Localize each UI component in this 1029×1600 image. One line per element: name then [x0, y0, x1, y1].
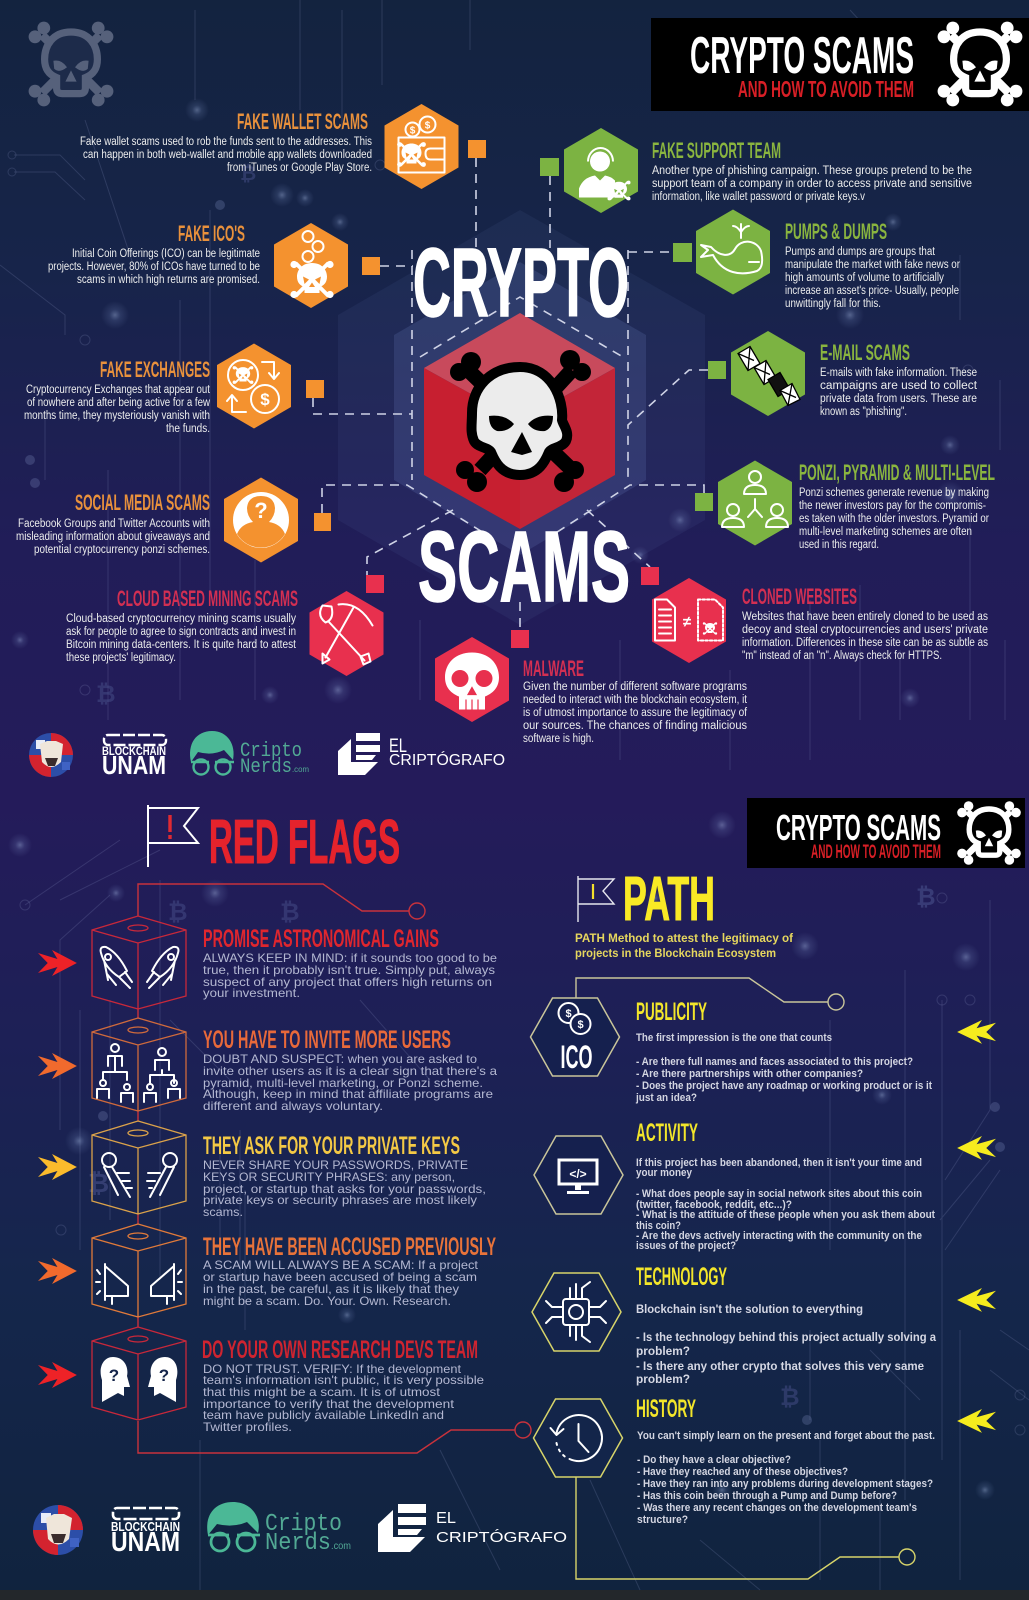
icon: code monitor hexagon: </>: [569, 1167, 587, 1181]
panel: fake exchanges: the funds.: [166, 423, 210, 435]
panel: cloned websites: decoy and steal cryptocurrencies and users' private: [742, 624, 988, 636]
path intro text: [575, 933, 793, 960]
panel: promise astronomical gains: ALWAYS KEEP IN MIND: if it sounds too good to be: [203, 951, 497, 965]
icon: coins and skull hexagon: [274, 223, 348, 308]
icon: exchange hexagon: $: [260, 390, 270, 409]
logo strip: partners bottom: [33, 1502, 567, 1557]
cube with head question icons: ?: [159, 1366, 169, 1385]
panel: do your own research devs team: team have publicly available LinkedIn and: [203, 1408, 444, 1422]
panel: fake ico's: projects. However, 80% of ICOs have turned to be: [48, 261, 260, 273]
panel: you have to invite more users: DOUBT AND SUSPECT: when you are asked to: [203, 1052, 477, 1066]
panel: social media scams: potential cryptocurrency ponzi schemes.: [34, 544, 210, 556]
panel: fake ico's: FAKE ICO'S: [178, 221, 245, 246]
panel: malware: [435, 630, 748, 745]
connector square: [673, 243, 692, 262]
panel: activity: ACTIVITY: [636, 1119, 698, 1147]
arrow: [38, 1258, 77, 1284]
panel: cloud based mining scams: CLOUD BASED MINING SCAMS: [117, 586, 298, 611]
panel: cloned websites: information. Differences in these site can be as subtle as: [742, 637, 988, 649]
logo: el criptografo: EL: [436, 1510, 456, 1527]
arrow: [957, 1409, 996, 1433]
cube with rocket icons: [92, 916, 186, 1009]
icon: red flag: [148, 805, 198, 867]
arrow: [38, 1362, 77, 1388]
panel: malware: MALWARE: [523, 656, 584, 681]
logo: cripto nerds: [207, 1502, 351, 1557]
panel: technology: - Is the technology behind this project actually solving a: [636, 1330, 936, 1344]
panel: they have been accused previously: or startup have been accused of being a scam: [203, 1270, 477, 1284]
panel: malware: software is high.: [523, 733, 594, 745]
cube with hierarchy icons: [92, 1018, 186, 1111]
panel: social media scams: [16, 478, 331, 562]
path connector wires: [576, 978, 915, 1579]
icon: clock history hexagon: [534, 1399, 622, 1477]
panel: social media scams: Facebook Groups and Twitter Accounts with: [18, 518, 210, 530]
connector square: [468, 140, 486, 158]
panel: publicity: - Are there partnerships with other companies?: [636, 1068, 863, 1080]
text: ₿: [168, 899, 188, 926]
panel: e-mail scams: campaigns are used to collect: [820, 380, 978, 392]
panel: you have to invite more users: Although, keep in mind that affiliate programs are: [203, 1087, 493, 1101]
icon: white skull hexagon: [435, 637, 509, 722]
panel: publicity: - Are there full names and faces associated to this project?: [636, 1056, 913, 1068]
panel: history: - Do they have a clear objective?: [637, 1454, 791, 1466]
panel: fake wallet scams: FAKE WALLET SCAMS: [237, 109, 368, 134]
title: crypto: CRYPTO: [413, 228, 629, 337]
panel: you have to invite more users: [38, 1018, 497, 1113]
panel: cloud based mining scams: Bitcoin mining data-centers. It is quite hard to attest: [66, 639, 297, 651]
panel: pumps and dumps: increase an asset's price- Usually, people: [785, 285, 959, 297]
panel: activity: issues of the project?: [636, 1240, 736, 1252]
connector square: [695, 493, 713, 511]
panel: they have been accused previously: A SCAM WILL ALWAYS BE A SCAM: If a project: [203, 1258, 479, 1272]
panel: publicity: The first impression is the one that counts: [636, 1032, 832, 1044]
panel: fake support team: information, like wallet password or private keys.v: [652, 191, 865, 203]
icon: path flag: [578, 876, 614, 922]
panel: do your own research devs team: importance to verify that the development: [203, 1397, 455, 1411]
central hexagon backdrop: [338, 210, 705, 625]
icon: code monitor hexagon: [534, 1136, 623, 1214]
icon: ai chip hexagon: [532, 1273, 621, 1351]
icon: ico coins hexagon: ICO: [560, 1039, 592, 1075]
connector square: [708, 361, 726, 379]
logo: cripto nerds: Nerds: [240, 756, 292, 779]
panel: malware: needed to interact with the blockchain ecosystem, it: [523, 694, 748, 706]
logo: cripto nerds: .com: [292, 765, 309, 774]
panel: cloned websites: "m" instead of an "n". Always check for HTTPS.: [742, 650, 942, 662]
logo: el criptografo: CRIPTÓGRAFO: [436, 1529, 567, 1546]
connector square: [540, 158, 559, 176]
icon: anonymous person hexagon: [224, 478, 298, 562]
panel: activity: (twitter, facebook, reddit, etc...)?: [636, 1199, 792, 1211]
panel: fake ico's: scams in which high returns are promised.: [77, 274, 260, 286]
panel: history: - Has this coin been through a Pump and Dump before?: [637, 1490, 897, 1502]
connector square: [306, 380, 324, 398]
panel: pumps and dumps: [673, 210, 960, 310]
panel: technology: problem?: [636, 1372, 690, 1386]
central red cube: [424, 313, 615, 529]
panel: activity: your money: [636, 1167, 693, 1179]
panel: activity: - Are the devs actively interacting with the community on the: [636, 1230, 922, 1242]
panel: do your own research devs team: team's information isn't public, it is very possible: [203, 1373, 484, 1387]
cube with key circuit icons: [92, 1121, 186, 1214]
panel: do your own research devs team: DO NOT TRUST. VERIFY: If the development: [203, 1362, 462, 1376]
panel: promise astronomical gains: your investment.: [203, 986, 300, 1000]
panel: history: [534, 1395, 996, 1526]
icon: wallet hexagon: [384, 104, 458, 189]
icon: ico coins hexagon: $: [565, 1008, 572, 1020]
panel: activity: this coin?: [636, 1220, 681, 1232]
panel: they ask for your private keys: NEVER SHARE YOUR PASSWORDS, PRIVATE: [203, 1158, 468, 1172]
panel: they have been accused previously: might be a scam. Do. Your. Own. Research.: [203, 1294, 451, 1308]
connector square: [366, 575, 384, 593]
panel: fake exchanges: months time, they mysteriously vanish with: [24, 410, 210, 422]
panel: do your own research devs team: DO YOUR OWN RESEARCH DEVS TEAM: [202, 1336, 478, 1364]
panel: they have been accused previously: in the past, be careful, as it is likely that they: [203, 1282, 459, 1296]
panel: cloned websites: Websites that have been entirely cloned to be used as: [742, 611, 988, 623]
panel: e-mail scams: known as "phishing".: [820, 406, 907, 418]
panel: history: structure?: [637, 1514, 688, 1526]
panel: history: You can't simply learn on the present and forget about the past.: [637, 1430, 935, 1442]
logo: bulldog crest: [29, 733, 73, 777]
panel: ponzi pyramid and multi-level: es taken with the older investors. Pyramid or: [799, 513, 989, 525]
arrow: [38, 1154, 77, 1180]
panel: publicity: just an idea?: [635, 1092, 697, 1104]
panel: promise astronomical gains: [38, 916, 497, 1009]
logo: cripto nerds: [190, 731, 309, 779]
panel: technology: Blockchain isn't the solution to everything: [636, 1302, 863, 1316]
red flags connector wire: [138, 884, 531, 1453]
text: ₿: [96, 681, 116, 708]
panel: cloud based mining scams: these projects' legitimacy.: [66, 652, 176, 664]
central skull icon: [450, 350, 591, 492]
panel: fake exchanges: [24, 344, 324, 435]
panel: technology: TECHNOLOGY: [636, 1263, 727, 1291]
panel: activity: If this project has been abandoned, then it isn't your time and: [636, 1157, 922, 1169]
icon: pick and shovel hexagon: [310, 591, 384, 676]
panel: malware: our sources. The chances of finding malicious: [523, 720, 747, 732]
panel: e-mail scams: E-MAIL SCAMS: [820, 340, 910, 365]
panel: technology: - Is there any other crypto that solves this very same: [636, 1359, 924, 1373]
panel: history: - Have they reached any of these objectives?: [637, 1466, 848, 1478]
banner subtitle: AND HOW TO AVOID THEM: [738, 76, 914, 102]
connector square: [511, 630, 529, 648]
icon: whale hexagon: [696, 210, 770, 294]
panel: you have to invite more users: pyramid, multi-level marketing, or Ponzi scheme.: [203, 1076, 483, 1090]
logo strip: partners top: [29, 731, 505, 780]
text: ₿: [88, 1168, 109, 1198]
icon: wallet hexagon: $: [425, 120, 431, 132]
panel: e-mail scams: E-mails with fake information. These: [820, 367, 977, 379]
panel: pumps and dumps: unwittingly fall for this.: [785, 298, 881, 310]
panel: fake wallet scams: Fake wallet scams used to rob the funds sent to the addresses. This: [80, 136, 372, 148]
panel: you have to invite more users: invite other users as it is a clear sign that there's a: [203, 1064, 497, 1078]
icon: anonymous person hexagon: ?: [254, 498, 268, 523]
text: ₿: [916, 884, 936, 911]
logo: blockchain unam: UNAM: [102, 750, 166, 780]
logo: blockchain unam: UNAM: [111, 1526, 180, 1557]
path intro text: PATH Method to attest the legitimacy of: [575, 933, 793, 945]
icon: three people hexagon: [718, 460, 792, 546]
panel: fake support team: Another type of phishing campaign. These groups pretend to be the: [652, 165, 972, 177]
connector square: [314, 513, 331, 531]
logo: cripto nerds: Cripto: [240, 740, 302, 763]
panel: fake exchanges: FAKE EXCHANGES: [100, 357, 210, 382]
logo: cripto nerds: Nerds: [265, 1530, 331, 1557]
panel: history: - Have they ran into any problems during development stages?: [637, 1478, 933, 1490]
panel: social media scams: SOCIAL MEDIA SCAMS: [75, 490, 210, 515]
ghost skull icon: [29, 22, 113, 106]
banner skull icon: [957, 801, 1021, 865]
panel: ponzi pyramid and multi-level: the newer investors pay for the compromis-: [799, 500, 986, 512]
icon: cloned documents hexagon: ≠: [683, 614, 692, 630]
panel: fake support team: support team of a company in order to access private and sensitive: [652, 178, 972, 190]
panel: pumps and dumps: manipulate the market with fake news or: [785, 259, 960, 271]
panel: promise astronomical gains: suspect of any project that offers high returns on: [203, 975, 492, 989]
panel: ponzi pyramid and multi-level: Ponzi schemes generate revenue by making: [799, 487, 989, 499]
icon: exchange hexagon: [217, 344, 291, 428]
logo: blockchain unam: BLOCKCHAIN: [111, 1519, 180, 1534]
text: ₿: [280, 899, 300, 926]
arrow: [38, 950, 77, 976]
panel: promise astronomical gains: PROMISE ASTRONOMICAL GAINS: [203, 925, 439, 953]
arrow: [957, 1288, 996, 1312]
cube with head question icons: ?: [109, 1366, 119, 1385]
panel: e-mail scams: [708, 331, 978, 418]
panel: fake ico's: [48, 221, 380, 308]
icon: wallet hexagon: $: [410, 126, 416, 136]
icon: headset agent hexagon: [564, 128, 638, 213]
logo: cripto nerds: Cripto: [265, 1511, 342, 1538]
dashed connectors: [313, 158, 708, 630]
banner skull icon: [938, 22, 1022, 106]
logo: blockchain unam: [111, 1508, 180, 1557]
text: ₿: [780, 1384, 800, 1411]
panel: you have to invite more users: different and always voluntary.: [203, 1099, 383, 1113]
panel: you have to invite more users: YOU HAVE TO INVITE MORE USERS: [203, 1026, 451, 1054]
panel: cloud based mining scams: Cloud-based cryptocurrency mining scams usually: [66, 613, 296, 625]
logo: el criptografo: CRIPTÓGRAFO: [389, 750, 505, 769]
panel: publicity: PUBLICITY: [636, 998, 707, 1026]
panel: publicity: [530, 998, 996, 1104]
connector square: [641, 567, 659, 585]
panel: e-mail scams: private data from users. These are: [820, 393, 977, 405]
panel: fake wallet scams: [80, 104, 486, 189]
panel: history: HISTORY: [636, 1395, 696, 1423]
logo: el criptografo: EL: [389, 736, 407, 757]
panel: cloud based mining scams: ask for people to agree to sign contracts and invest in: [66, 626, 296, 638]
panel: technology: problem?: [636, 1344, 690, 1358]
arrow: [38, 1053, 77, 1079]
path intro text: projects in the Blockchain Ecosystem: [575, 948, 776, 960]
panel: fake wallet scams: can happen in both web-wallet and mobile app wallets downloaded: [83, 149, 372, 161]
panel: they ask for your private keys: project, or startup that asks for your passwords,: [203, 1182, 486, 1196]
panel: activity: - What is the attitude of these people when you ask them about: [636, 1209, 935, 1221]
panel: ponzi pyramid and multi-level: [695, 460, 995, 551]
header banner: crypto scams: [651, 18, 1029, 111]
logo: el criptografo: [378, 1504, 567, 1552]
text: ₿: [240, 163, 256, 185]
arrow: [957, 1136, 996, 1160]
panel: do your own research devs team: Twitter profiles.: [203, 1420, 292, 1434]
panel: pumps and dumps: Pumps and dumps are groups that: [785, 246, 936, 258]
panel: technology: [532, 1263, 996, 1386]
logo: bulldog crest: [33, 1505, 83, 1555]
panel: do your own research devs team: [38, 1327, 484, 1434]
panel: ponzi pyramid and multi-level: multi-level marketing schemes are often: [799, 526, 972, 538]
icon: cloned documents hexagon: [652, 578, 726, 663]
icon: ico coins hexagon: [530, 998, 620, 1076]
panel: publicity: - Does the project have any roadmap or working product or is it: [636, 1080, 932, 1092]
panel: activity: [534, 1119, 996, 1252]
panel: pumps and dumps: high amounts of volume to artificially: [785, 272, 944, 284]
panel: malware: Given the number of different software programs: [523, 681, 747, 693]
panel: they ask for your private keys: THEY ASK FOR YOUR PRIVATE KEYS: [203, 1132, 460, 1160]
panel: promise astronomical gains: true, then it probably isn't true. Simply put, always: [203, 963, 495, 977]
panel: ponzi pyramid and multi-level: used in this regard.: [799, 539, 879, 551]
panel: they ask for your private keys: scams.: [203, 1205, 243, 1219]
panel: they have been accused previously: THEY HAVE BEEN ACCUSED PREVIOUSLY: [203, 1233, 496, 1261]
panel: fake ico's: Initial Coin Offerings (ICO) can be legitimate: [72, 248, 260, 260]
cube with head question icons: [92, 1327, 186, 1420]
panel: they have been accused previously: [38, 1224, 496, 1317]
logo: blockchain unam: [102, 735, 166, 780]
panel: activity: - What does people say in social network sites about this coin: [636, 1188, 922, 1200]
cube with megaphone icons: [92, 1224, 186, 1317]
panel: fake exchanges: of nowhere and after being active for a few: [27, 397, 211, 409]
panel: cloned websites: [641, 567, 988, 663]
logo: el criptografo: [338, 733, 505, 775]
panel: do your own research devs team: that this might be a scam. It is of utmost: [203, 1385, 441, 1399]
panel: fake wallet scams: from iTunes or Google Play Store.: [227, 162, 372, 174]
arrow: [957, 1020, 996, 1044]
icon: ico coins hexagon: $: [577, 1019, 584, 1031]
panel: fake support team: FAKE SUPPORT TEAM: [652, 138, 781, 163]
panel: fake exchanges: Cryptocurrency Exchanges that appear out: [26, 384, 211, 396]
connector square: [362, 257, 380, 275]
logo: cripto nerds: .com: [331, 1541, 351, 1552]
heading: red flags: RED FLAGS: [209, 808, 400, 877]
secondary banner: crypto scams: [747, 798, 1025, 868]
panel: they ask for your private keys: [38, 1121, 486, 1219]
panel: cloud based mining scams: [66, 575, 384, 676]
panel: they ask for your private keys: KEYS OR SECURITY PHRASES: any person,: [203, 1170, 455, 1184]
logo: blockchain unam: BLOCKCHAIN: [102, 744, 166, 758]
panel: fake support team: [540, 128, 972, 213]
panel: pumps and dumps: PUMPS & DUMPS: [785, 219, 887, 244]
panel: cloned websites: CLONED WEBSITES: [742, 584, 857, 609]
panel: malware: is of utmost importance to assure the legitimacy of: [523, 707, 748, 719]
title: scams: SCAMS: [418, 511, 630, 623]
heading: path: PATH: [623, 865, 715, 934]
icon: envelopes hexagon: [731, 331, 805, 416]
panel: history: - Was there any recent changes on the development team's: [637, 1502, 917, 1514]
panel: social media scams: misleading information about giveaways and: [16, 531, 210, 543]
panel: they ask for your private keys: private keys or security phrases are most likely: [203, 1193, 477, 1207]
